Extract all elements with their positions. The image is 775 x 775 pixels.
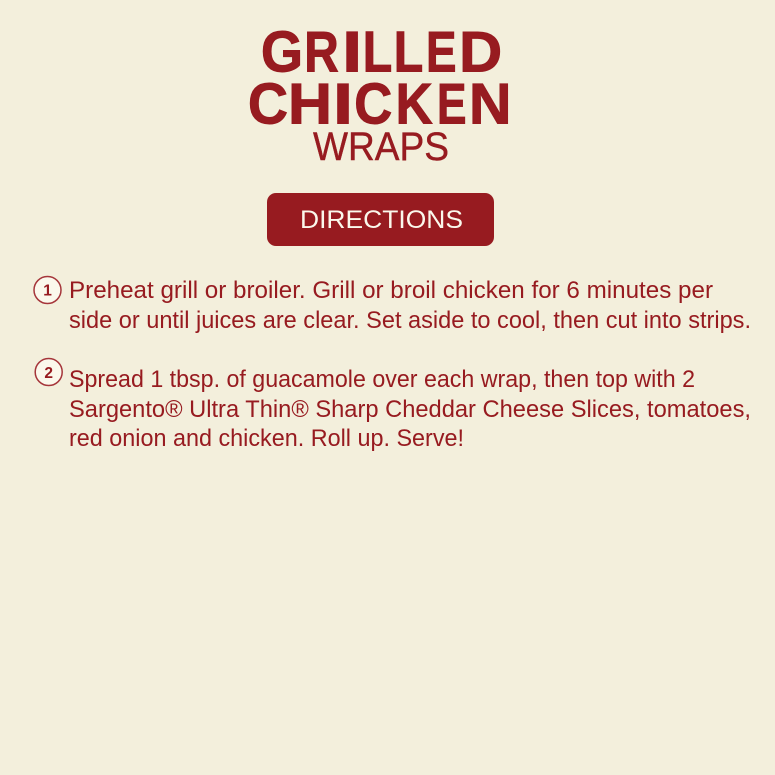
step 1 (34, 276, 751, 334)
title: C (248, 72, 288, 136)
title: C (354, 72, 392, 136)
title: L (394, 20, 423, 84)
title: I (333, 72, 353, 136)
title: WRAPS (313, 125, 449, 169)
step 2 text: Spread 1 tbsp. of guacamole over each wrap, then top with 2 (69, 366, 695, 393)
title (248, 20, 512, 169)
title: L (363, 20, 392, 84)
title: E (426, 20, 456, 84)
step 1 text (69, 277, 751, 334)
icon: number 1 (34, 276, 61, 304)
directions badge (267, 193, 494, 246)
title: I (342, 20, 362, 84)
step 2 text: red onion and chicken. Roll up. Serve! (69, 425, 464, 452)
step 2 (35, 358, 751, 452)
step 1 text: Preheat grill or broiler. Grill or broil chicken for 6 minutes per (69, 277, 713, 304)
icon: number 1: 1 (43, 282, 52, 300)
directions badge: DIRECTIONS (300, 206, 463, 234)
title: N (469, 72, 512, 136)
step 1 text: side or until juices are clear. Set aside to cool, then cut into strips. (69, 307, 751, 334)
step 2 text (69, 366, 751, 452)
title: G (261, 20, 303, 84)
title: E (437, 72, 466, 136)
step 2 text: Sargento® Ultra Thin® Sharp Cheddar Cheese Slices, tomatoes, (69, 396, 751, 423)
icon: number 2 (35, 358, 62, 386)
title: H (288, 72, 332, 136)
title: R (304, 20, 339, 84)
icon: number 2: 2 (44, 365, 53, 382)
title: K (396, 72, 433, 136)
title: D (459, 20, 502, 84)
